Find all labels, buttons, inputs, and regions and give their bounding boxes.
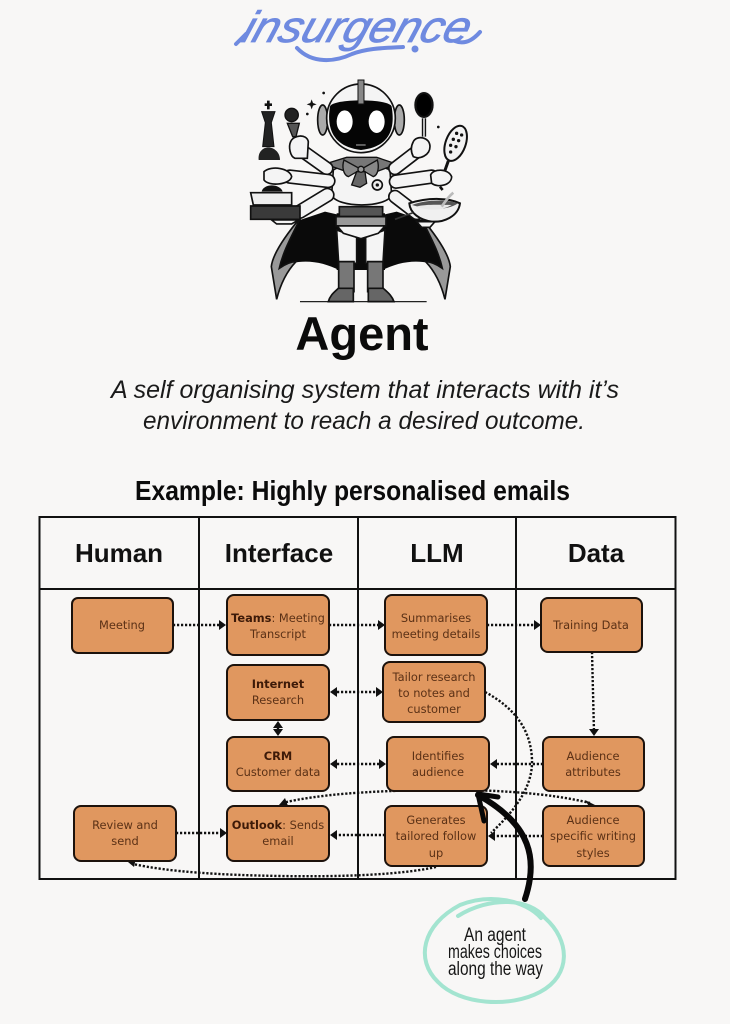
illustration: multi-armed robot agent: [251, 80, 471, 302]
callout: an agent makes choices: An agent: [464, 925, 527, 946]
box: Training Data: Training Data: [552, 618, 629, 632]
box: Identifies audience: audience: [412, 765, 464, 779]
subtitle: environment to reach a desired outcome.: [143, 407, 585, 435]
box: Summarises meeting details: [385, 595, 487, 655]
column header: Interface: Interface: [225, 538, 333, 568]
subtitle: [109, 376, 619, 435]
box: CRM: CRM: [264, 749, 292, 763]
box: CRM: Customer data: [236, 765, 320, 779]
arrow: callout to identifies audience: [478, 794, 531, 899]
box: Identifies audience: Identifies: [412, 749, 464, 763]
title: Agent: [295, 307, 429, 360]
box: Summarises meeting details: Summarises: [401, 611, 471, 625]
box: Tailor research: Tailor research: [392, 670, 475, 684]
box: Internet Research: Research: [252, 693, 304, 707]
icon: spoon: [411, 92, 434, 158]
callout: an agent makes choices: [425, 899, 564, 1002]
box: Teams: [227, 595, 329, 655]
sparkles: [306, 92, 440, 128]
box: Review and send: send: [111, 834, 139, 848]
box: Outlook: Outlook: Sends: [232, 818, 324, 832]
icon: books and fist: [251, 168, 300, 224]
box: Audience attributes: [543, 737, 644, 791]
callout: an agent makes choices: along the way: [448, 959, 543, 980]
box: Tailor research: [383, 662, 485, 722]
arms: [290, 152, 432, 213]
column header: Human: Human: [75, 538, 163, 568]
connectors: [128, 620, 599, 876]
icon: chess pawn: [285, 108, 308, 158]
box: Training Data: [541, 598, 642, 652]
box: Summarises meeting details: meeting details: [392, 627, 480, 641]
subtitle: A self organising system that interacts with it’s: [109, 376, 619, 404]
box: Generates tailored follow up: Generates: [406, 813, 466, 827]
box: Tailor research: to notes and: [398, 686, 470, 700]
column header: LLM: LLM: [410, 538, 464, 568]
box: Identifies audience: [387, 737, 489, 791]
box: Review and send: Review and: [92, 818, 158, 832]
box: Tailor research: customer: [407, 702, 461, 716]
box: Audience specific writing styles: [543, 806, 644, 866]
box: Internet Research: Internet: [252, 677, 305, 691]
logo: insurgence: insurgence: [237, 2, 479, 52]
icon: chess king: [259, 101, 280, 160]
icon: slotted spatula: [431, 123, 471, 190]
torso: [332, 165, 392, 239]
box: Generates tailored follow up: tailored follow: [396, 829, 476, 843]
box: Teams: Teams: Meeting: [231, 611, 325, 625]
robot head: [318, 80, 404, 153]
cape collar and bow tie: [325, 157, 397, 187]
box: Teams: Transcript: [249, 627, 306, 641]
box: Review and send: [74, 806, 176, 861]
example heading: Example: Highly personalised emails: [135, 475, 570, 506]
box: Generates tailored follow up: up: [429, 846, 443, 860]
column header: Data: Data: [568, 538, 625, 568]
box: Audience specific writing styles: specific writing: [550, 829, 636, 843]
box: Audience attributes: Audience: [567, 749, 619, 763]
icon: mixing bowl: [395, 193, 460, 227]
box: Audience specific writing styles: Audience: [567, 813, 619, 827]
legs and boots: [328, 230, 394, 302]
box: Audience attributes: attributes: [565, 765, 621, 779]
box: Audience specific writing styles: styles: [576, 846, 610, 860]
cape: [271, 212, 450, 299]
box: Outlook: email: [262, 834, 294, 848]
box: Meeting: [72, 598, 173, 653]
box: Meeting: Meeting: [99, 618, 145, 632]
ground shadow: [300, 300, 427, 304]
box: CRM: [227, 737, 329, 791]
box: Internet Research: [227, 665, 329, 720]
callout: an agent makes choices: makes choices: [448, 942, 542, 963]
box: Generates tailored follow up: [385, 806, 487, 866]
box: Outlook: [227, 806, 329, 861]
swimlane table: [39, 517, 676, 879]
